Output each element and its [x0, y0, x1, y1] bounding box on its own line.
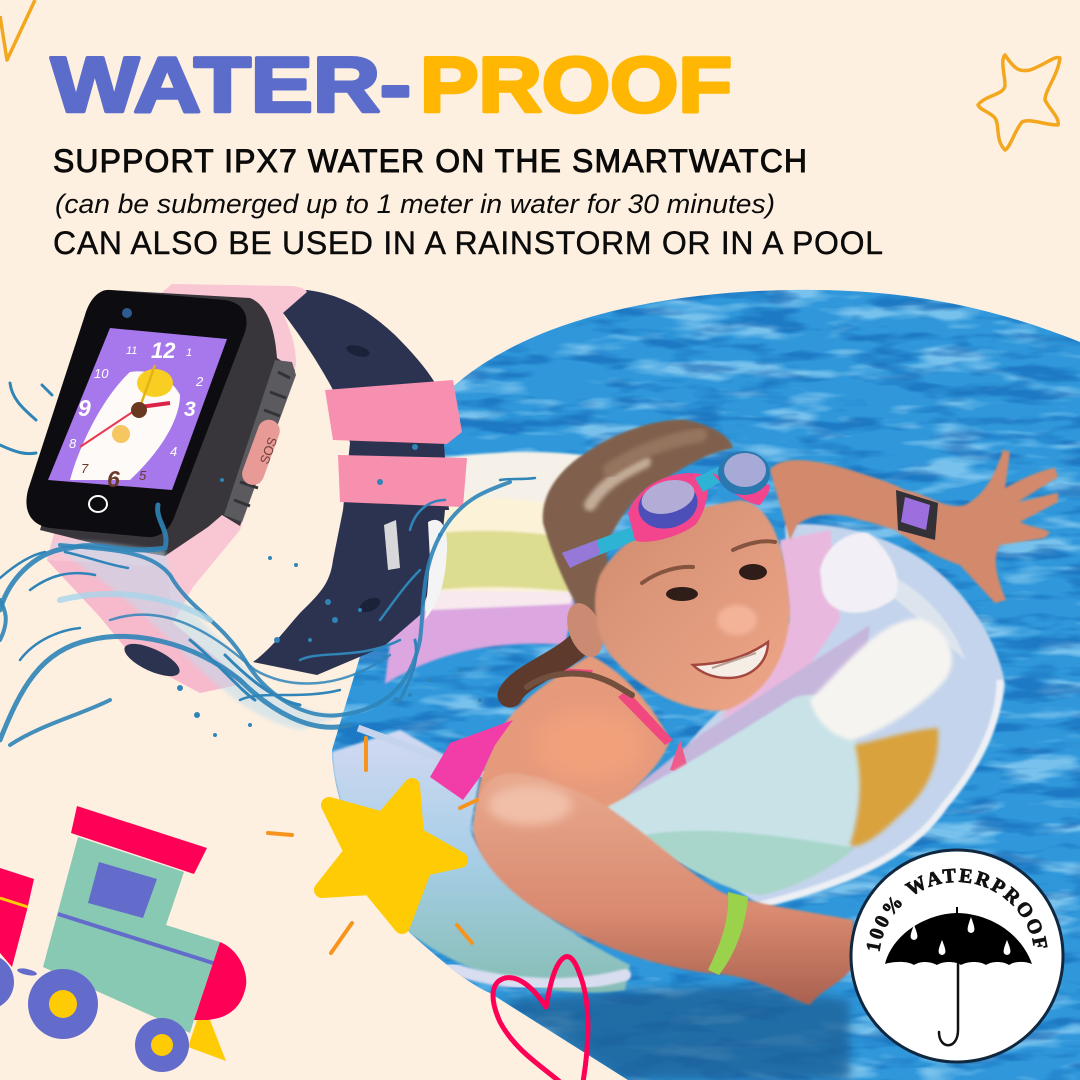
clock numerals: 4 — [170, 444, 177, 459]
ring white highlight — [810, 618, 952, 740]
ring white rim — [450, 968, 625, 984]
lower ring left — [332, 728, 630, 993]
clock numerals: 6 — [107, 466, 120, 492]
braid — [510, 640, 632, 695]
smile — [693, 642, 768, 678]
clock numerals: 7 — [81, 461, 89, 476]
train roof — [71, 806, 207, 874]
train illustration — [0, 806, 246, 1072]
rain drops — [911, 917, 1010, 955]
red carriage — [0, 868, 34, 967]
speaker grill — [224, 360, 296, 522]
left wheel — [0, 954, 14, 1010]
pink case back — [47, 284, 307, 693]
arm raised with hand — [770, 450, 1058, 603]
yellow star — [322, 786, 460, 926]
goggles — [562, 451, 770, 568]
lower strap — [253, 510, 445, 675]
subtitle text block: CAN ALSO BE USED IN A RAINSTORM OR IN A POOL — [53, 225, 883, 261]
home button — [89, 496, 107, 512]
smartwatch — [26, 284, 467, 693]
green wristband — [708, 892, 748, 975]
SOS button — [239, 417, 283, 488]
pink bottom strap — [47, 560, 247, 693]
eyes and brows — [642, 541, 775, 601]
ear — [560, 598, 610, 662]
rainbow ring back — [385, 452, 600, 684]
buckle — [384, 520, 447, 620]
subtitle text block — [53, 143, 883, 261]
strap hole lower — [357, 595, 383, 615]
droplets — [177, 444, 482, 737]
watch front bezel — [26, 290, 247, 537]
dark water lower — [500, 985, 850, 1080]
clock numerals: 1 — [186, 347, 192, 359]
water splash — [0, 383, 535, 745]
ring seam strip — [358, 728, 488, 776]
unicorn cat — [70, 371, 180, 480]
nose — [717, 605, 757, 635]
ring valve — [820, 533, 898, 613]
hair — [543, 420, 733, 630]
gold glitter — [850, 728, 938, 846]
clock numerals: 12 — [151, 338, 176, 363]
body stripe — [58, 914, 213, 963]
light ripples — [320, 280, 1080, 1080]
title — [51, 40, 732, 128]
star outline top right — [978, 55, 1060, 150]
hair side highlight — [610, 435, 700, 470]
shoulder highlight — [535, 710, 645, 780]
pink loop upper — [325, 380, 462, 444]
umbrella — [885, 907, 1032, 1045]
ring green water — [645, 831, 855, 895]
outer scalloped rim — [760, 680, 1000, 905]
splash ribbon upper — [0, 505, 166, 610]
torso — [476, 655, 670, 867]
girl — [430, 420, 1058, 867]
strap slot — [120, 637, 184, 683]
arm — [473, 773, 853, 1005]
title: PROOF — [420, 40, 732, 128]
train window — [88, 862, 157, 918]
wheel connector — [17, 967, 37, 977]
clock numerals: 10 — [94, 366, 109, 381]
camera — [122, 308, 132, 318]
cow catcher — [188, 1020, 226, 1061]
back ring right — [610, 524, 1005, 905]
title: WATER- — [51, 40, 411, 128]
swimsuit pink — [430, 668, 690, 800]
pool water — [320, 280, 1080, 1080]
heart outline — [493, 957, 588, 1080]
clock numerals — [69, 338, 204, 492]
badge circle — [851, 850, 1063, 1062]
inflatable ring front — [607, 533, 952, 895]
orange accent dashes — [268, 738, 477, 953]
dark side panel — [40, 290, 295, 556]
ring pale blue body — [607, 695, 862, 890]
train nose — [194, 942, 246, 1020]
splash pale wash — [50, 542, 345, 730]
clock numerals: 3 — [184, 398, 196, 421]
grill mesh — [234, 372, 290, 506]
pool photo panel — [320, 280, 1080, 1080]
subtitle text block: (can be submerged up to 1 meter in water for 30 minutes) — [55, 189, 775, 219]
pink loop lower — [338, 455, 467, 507]
clock numerals: 2 — [195, 374, 204, 389]
wristwatch on girl — [896, 490, 938, 540]
hair highlight — [590, 462, 645, 505]
clock numerals: 8 — [69, 436, 77, 451]
face — [595, 500, 790, 711]
SOS button: SOS — [257, 435, 280, 466]
splash loop lower — [0, 636, 350, 740]
arm highlight — [488, 785, 572, 825]
carriage stripe — [0, 898, 28, 907]
lollipop — [112, 425, 130, 443]
clock hands — [80, 407, 140, 447]
train body — [43, 837, 220, 1033]
strap holes — [345, 343, 371, 359]
chevron top left — [0, 0, 35, 60]
clock numerals: 5 — [139, 468, 147, 483]
girl lower arm — [473, 773, 853, 1005]
rear wheel — [135, 1018, 189, 1072]
waterproof badge — [850, 848, 1064, 1064]
deep ripples — [320, 280, 1080, 1080]
front wheel — [28, 969, 98, 1039]
clock numerals: 9 — [78, 395, 91, 421]
yellow hat — [137, 369, 173, 397]
screen — [48, 328, 227, 492]
left drips — [0, 383, 52, 454]
clock numerals: 11 — [126, 345, 137, 357]
subtitle text block: SUPPORT IPX7 WATER ON THE SMARTWATCH — [53, 143, 807, 179]
badge text: 100% WATERPROOF — [866, 868, 1048, 952]
upper strap — [283, 290, 449, 510]
